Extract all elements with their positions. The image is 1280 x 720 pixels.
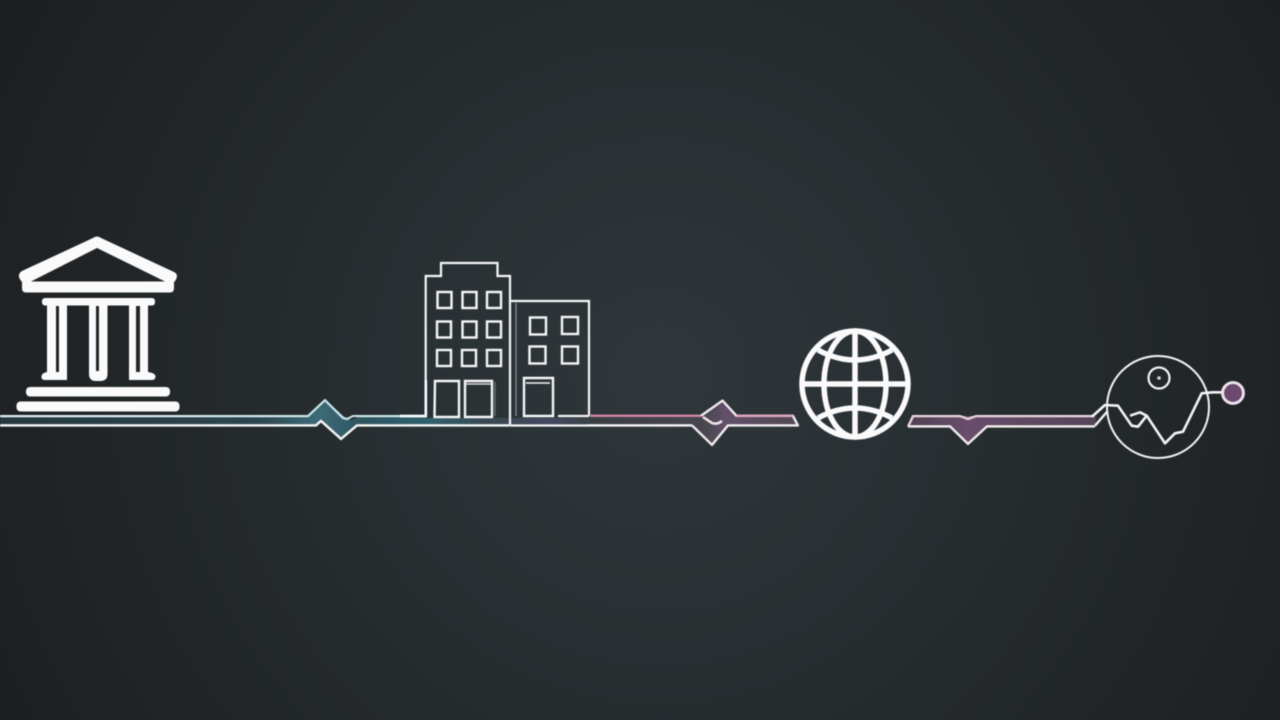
timeline segment: globe to chart xyxy=(908,416,1096,444)
short building outline xyxy=(510,301,589,416)
end node xyxy=(1222,382,1244,404)
timeline segment: buildings to globe xyxy=(510,400,798,445)
target marker xyxy=(1148,368,1170,388)
timeline segment: temple to buildings xyxy=(0,380,590,439)
outer circle xyxy=(1107,356,1209,458)
icon: office buildings xyxy=(400,263,589,425)
doors xyxy=(434,378,553,417)
icon: chart in circle with end node xyxy=(1092,356,1244,458)
icon: classical bank temple xyxy=(16,236,180,412)
tall building windows xyxy=(437,292,501,366)
tall building outline xyxy=(400,263,510,425)
short building windows xyxy=(530,317,578,364)
trend line xyxy=(1092,392,1222,443)
icon: globe xyxy=(802,331,908,437)
